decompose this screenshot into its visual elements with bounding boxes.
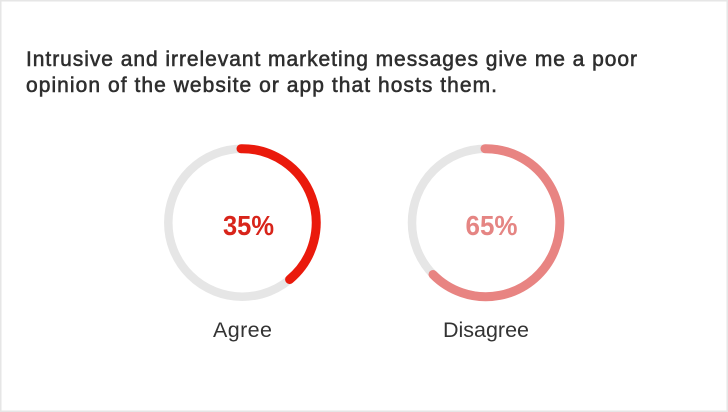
donut chart: agree 35% xyxy=(168,149,316,342)
value: 65%: 65% xyxy=(466,210,518,241)
title xyxy=(26,48,637,97)
donut chart: disagree 65% xyxy=(412,149,560,342)
title: opinion of the website or app that hosts them. xyxy=(26,74,497,97)
title: Intrusive and irrelevant marketing messages give me a poor xyxy=(26,48,637,71)
label: agree: Agree xyxy=(213,318,272,342)
label: disagree: Disagree xyxy=(443,318,529,342)
value: 35%: 35% xyxy=(223,210,274,241)
